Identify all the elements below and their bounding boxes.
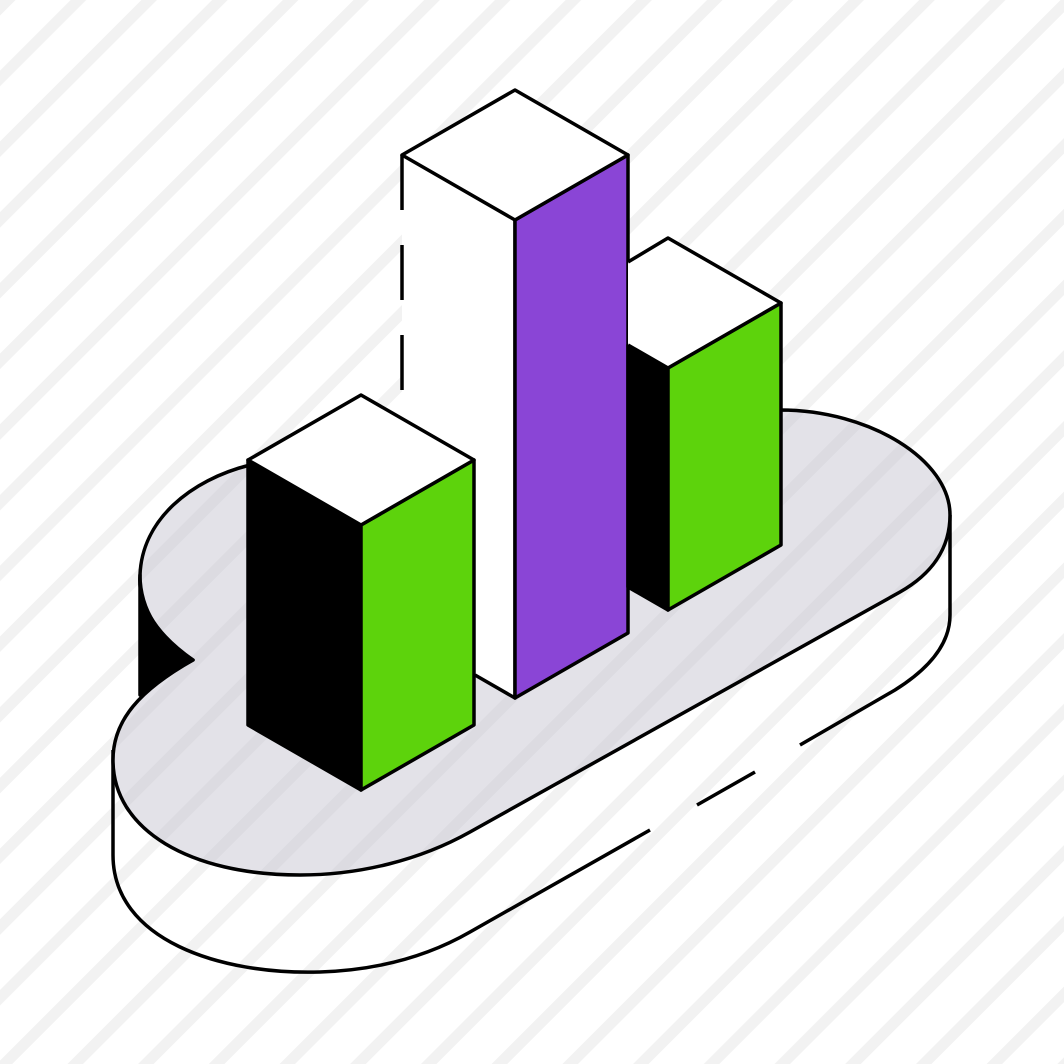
- cloud platform: [113, 410, 950, 972]
- cloud top surface: [113, 410, 950, 875]
- front green bar: [248, 395, 474, 790]
- cloud left shadow side: [140, 575, 193, 695]
- back green bar: [628, 238, 781, 610]
- cloud side wall: [113, 515, 950, 972]
- tall purple bar: [402, 90, 628, 698]
